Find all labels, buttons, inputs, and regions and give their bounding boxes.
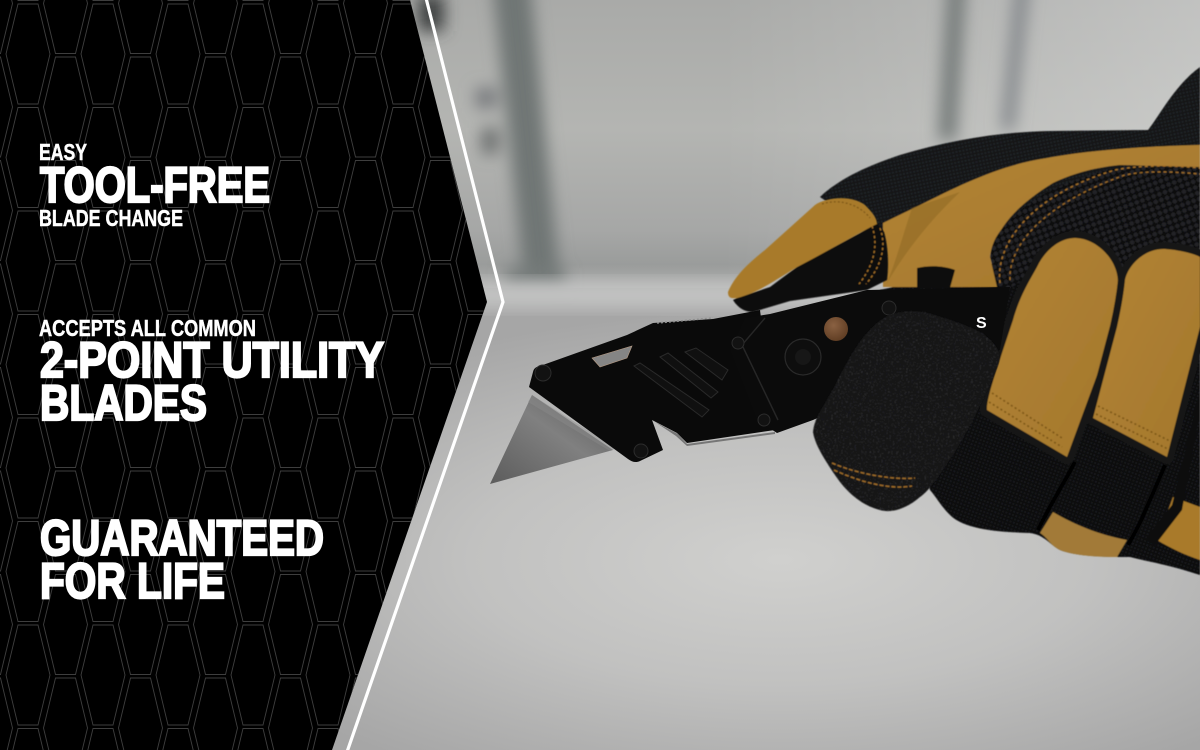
thumb black — [733, 223, 888, 312]
finger: index — [987, 238, 1118, 457]
blade window — [592, 346, 632, 367]
feature 2: utility blades: 2-POINT UTILITY — [40, 332, 384, 388]
knife front body — [529, 310, 775, 462]
thumb of gloved hand — [728, 198, 888, 312]
brown release button — [824, 317, 848, 341]
glove wrist and mesh back — [820, 67, 1200, 240]
feature 3: guarantee: GUARANTEED — [40, 510, 324, 566]
spine serrations — [657, 318, 713, 323]
lower knuckle patches — [1038, 392, 1200, 560]
chevron white outline — [347, 0, 503, 750]
feature 1: tool-free: EASY — [39, 139, 87, 165]
thumb tan tip — [728, 198, 877, 298]
feature 2: utility blades: ACCEPTS ALL COMMON — [39, 315, 256, 341]
feature 2: utility blades — [39, 315, 384, 431]
glove inner black base — [880, 200, 1200, 575]
notch blade glint — [655, 422, 775, 446]
body screws — [535, 301, 896, 458]
feature 1: tool-free — [39, 139, 270, 231]
feature 2: utility blades: BLADES — [40, 375, 207, 431]
feature 1: tool-free: TOOL-FREE — [40, 157, 270, 213]
pivot screw — [785, 339, 821, 375]
tan fold shadow — [886, 192, 960, 285]
gloved hand — [820, 67, 1200, 575]
feature 3: guarantee — [40, 510, 324, 609]
rubber palm pad — [990, 167, 1200, 295]
handle — [730, 287, 1010, 433]
grip ridges — [634, 348, 728, 417]
blade — [490, 395, 613, 484]
feature 1: tool-free: BLADE CHANGE — [39, 205, 183, 231]
feature 3: guarantee: FOR LIFE — [40, 553, 225, 609]
finger: middle — [1093, 249, 1200, 457]
black hexagon panel — [0, 0, 487, 750]
knife text mark: S — [976, 315, 987, 332]
glove tan back panel — [883, 145, 1200, 287]
gripping finger pad — [810, 305, 1005, 515]
utility knife — [490, 287, 1010, 484]
